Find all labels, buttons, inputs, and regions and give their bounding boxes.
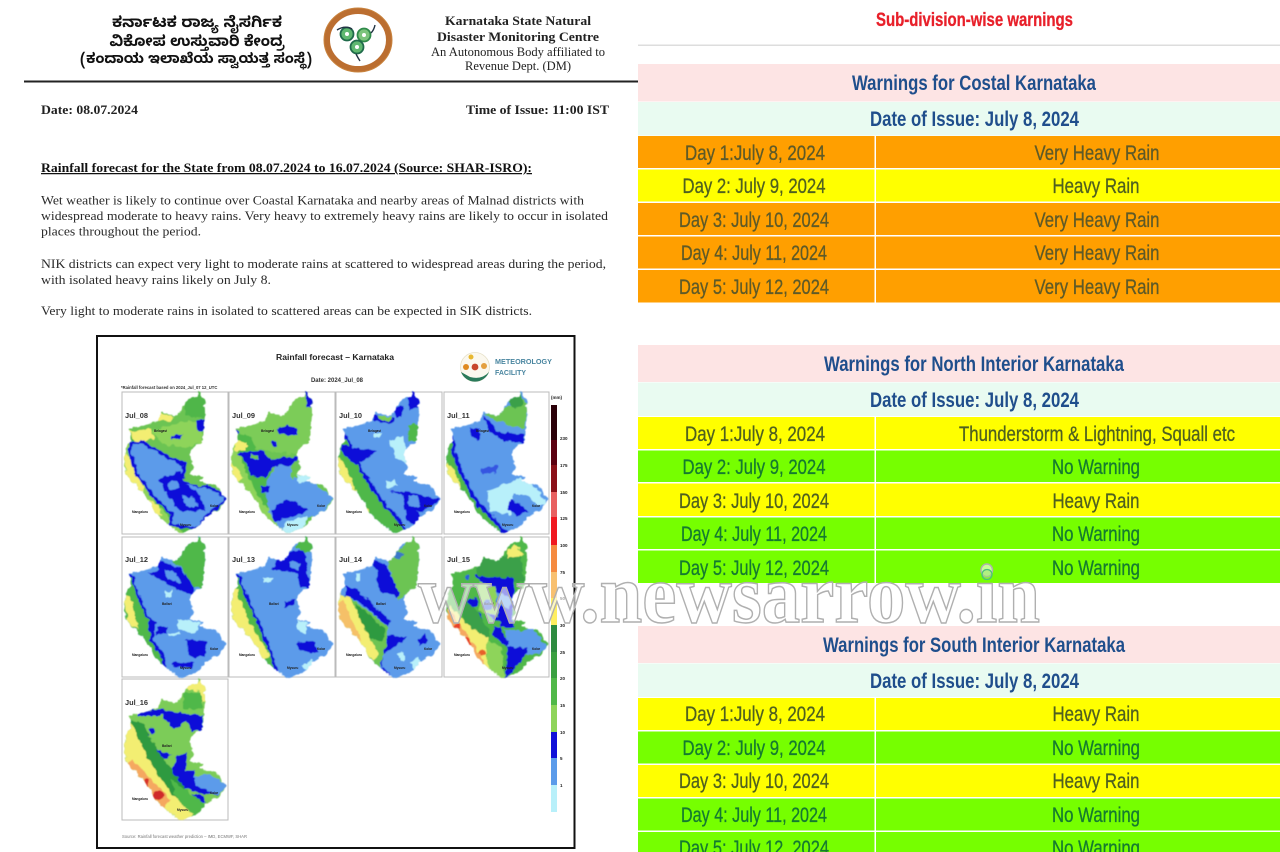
map: Jul_16: Mangaluru: [132, 797, 148, 801]
row: Day 5: [638, 832, 1280, 852]
date of issue: Date of Issue: July 8, 2024: [870, 389, 1079, 412]
row: Day 3: [638, 203, 1280, 235]
map: Jul_12: Mysuru: [180, 666, 191, 670]
map: Jul_10: Mysuru: [394, 523, 405, 527]
row: Day 4: [638, 518, 1280, 549]
row: Day 1: Day 1:July 8, 2024: [685, 142, 825, 165]
row: Day 1: Day 1:July 8, 2024: [685, 423, 825, 446]
text block: coastal forecast: widespread moderate to heavy rains. Very heavy to extremely heavy rains are likely to occur in isolated: [41, 209, 609, 223]
issue time: Time of Issue: 11:00 IST: [466, 103, 610, 117]
row: Day 3: Heavy Rain: [1052, 770, 1140, 793]
date of issue: Date of Issue: July 8, 2024: [870, 670, 1079, 693]
row: Day 3: Very Heavy Rain: [1034, 209, 1160, 232]
row: Day 4: Day 4: July 11, 2024: [681, 523, 827, 546]
table heading: [638, 64, 1280, 102]
Kannada organisation name: ವಿಕೋಪ ಉಸ್ತುವಾರಿ ಕೇಂದ್ರ: [110, 33, 285, 55]
map: Jul_08: Kolar: [210, 504, 219, 508]
text block: NIK forecast: NIK districts can expect very light to moderate rains at scattered to widespread areas during the period,: [41, 257, 606, 271]
map: Jul_08: Belagavi: [154, 429, 167, 433]
row: Day 3: Day 3: July 10, 2024: [679, 209, 829, 232]
map: Jul_14: Kolar: [424, 647, 433, 651]
map: Jul_12: Kolar: [210, 647, 219, 651]
text block: coastal forecast: places throughout the period.: [41, 224, 201, 238]
row: Day 3: Day 3: July 10, 2024: [679, 770, 829, 793]
map: Jul_15: Mangaluru: [454, 653, 470, 657]
map: Jul_14: Mysuru: [394, 666, 405, 670]
row: Day 4: Day 4: July 11, 2024: [681, 804, 827, 827]
map: Jul_16: Kolar: [210, 791, 219, 795]
row: Day 3: Heavy Rain: [1052, 490, 1140, 513]
map sheet date: Date: 2024_Jul_08: [311, 378, 364, 384]
row: Day 1: [638, 698, 1280, 730]
map: Jul_11: Jul_11: [447, 411, 470, 420]
row: Day 1: [638, 417, 1280, 449]
legend: rainfall colour bar: 20: [560, 676, 566, 681]
legend: rainfall colour bar: 125: [560, 516, 568, 521]
legend: rainfall colour bar: 100: [560, 543, 568, 548]
map: Jul_09: Mysuru: [287, 523, 298, 527]
row: Day 3: [638, 484, 1280, 516]
map: Jul_11: Mangaluru: [454, 510, 470, 514]
row: Day 4: [638, 798, 1280, 830]
row: Day 1: Very Heavy Rain: [1034, 142, 1160, 165]
English organisation name: An Autonomous Body affiliated to: [431, 45, 605, 59]
map: Jul_09: Kolar: [317, 504, 326, 508]
icon: meteorology facility logo: [460, 352, 552, 382]
map: Jul_14: Jul_14: [339, 555, 363, 564]
map: Jul_16: Ballari: [162, 744, 172, 748]
map: Jul_11: Mysuru: [502, 523, 513, 527]
English organisation name: Revenue Dept. (DM): [465, 59, 571, 73]
map: Jul_14: Ballari: [376, 602, 386, 606]
row: Day 1: Heavy Rain: [1052, 703, 1140, 726]
legend: rainfall colour bar: 25: [560, 650, 566, 655]
legend: rainfall colour bar: 50: [560, 596, 566, 601]
map: Jul_13: Kolar: [317, 647, 326, 651]
map: Jul_10: Kolar: [424, 504, 433, 508]
map: Jul_14: [336, 537, 442, 679]
table heading: Warnings for North Interior Karnataka: [824, 353, 1124, 376]
issue date: Date: 08.07.2024: [41, 103, 139, 117]
map: Jul_09: Jul_09: [232, 411, 255, 420]
map: Jul_16: Mysuru: [177, 808, 188, 812]
legend: rainfall colour bar: 75: [560, 570, 566, 575]
English organisation name: [431, 14, 605, 73]
map: Jul_11: Kolar: [532, 504, 541, 508]
icon: meteorology facility logo: METEOROLOGY: [495, 357, 552, 366]
row: Day 4: Very Heavy Rain: [1034, 242, 1160, 265]
map: Jul_09: [227, 392, 335, 538]
date of issue: Date of Issue: July 8, 2024: [870, 108, 1079, 131]
row: Day 5: [638, 550, 1280, 583]
map: Jul_15: Jul_15: [447, 555, 470, 564]
map: Jul_10: [334, 392, 442, 538]
map: Jul_10: Jul_10: [339, 411, 362, 420]
panel: South Interior Karnataka warnings: [638, 626, 1280, 852]
row: Day 2: No Warning: [1052, 737, 1140, 760]
legend: rainfall colour bar: 1: [560, 783, 563, 788]
map: Jul_08: Mangaluru: [132, 510, 148, 514]
text block: NIK forecast: [41, 257, 606, 287]
icon: meteorology facility logo: FACILITY: [495, 368, 526, 377]
map: Jul_09: Mangaluru: [239, 510, 255, 514]
map: Jul_15: Kolar: [532, 647, 541, 651]
panel: North Interior Karnataka warnings: [638, 345, 1280, 583]
table heading: [638, 626, 1280, 663]
map: Jul_08: Jul_08: [125, 411, 148, 420]
map: Jul_11: [442, 392, 550, 538]
row: Day 5: Day 5: July 12, 2024: [679, 557, 829, 580]
map: Jul_15: Ballari: [484, 602, 494, 606]
row: Day 5: [638, 270, 1280, 302]
text block: coastal forecast: [41, 194, 609, 238]
row: Day 1: Day 1:July 8, 2024: [685, 703, 825, 726]
map: Jul_15: [444, 537, 550, 679]
map: Jul_10: Mangaluru: [346, 510, 362, 514]
row: Day 2: No Warning: [1052, 456, 1140, 479]
map: Jul_12: [120, 537, 228, 683]
legend: rainfall colour bar: 15: [560, 703, 566, 708]
English organisation name: Disaster Monitoring Centre: [437, 30, 599, 44]
map: Jul_13: Mysuru: [287, 666, 298, 670]
English organisation name: Karnataka State Natural: [445, 14, 592, 28]
Kannada organisation name: [80, 14, 312, 71]
row: Day 5: Day 5: July 12, 2024: [679, 276, 829, 299]
map: Jul_16: [120, 679, 228, 825]
Kannada organisation name: (ಕಂದಾಯ ಇಲಾಖೆಯ ಸ್ವಾಯತ್ತ ಸಂಸ್ಥೆ): [80, 51, 312, 71]
map: Jul_14: Mangaluru: [346, 653, 362, 657]
text block: NIK forecast: with isolated heavy rains likely on July 8.: [41, 273, 271, 287]
row: Day 5: No Warning: [1052, 557, 1140, 580]
table heading: Warnings for Costal Karnataka: [852, 72, 1096, 95]
legend: rainfall colour bar: 175: [560, 463, 568, 468]
map: Jul_09: Belagavi: [261, 429, 274, 433]
row: Day 3: [638, 765, 1280, 797]
row: Day 2: Day 2: July 9, 2024: [682, 175, 826, 198]
map: Jul_11: Belagavi: [476, 429, 489, 433]
map: Jul_12: Ballari: [162, 602, 172, 606]
table heading: Warnings for South Interior Karnataka: [823, 634, 1125, 657]
map: Jul_08: Mysuru: [180, 523, 191, 527]
text block: coastal forecast: Wet weather is likely to continue over Coastal Karnataka and nearby areas of Malnad districts with: [41, 194, 585, 208]
map: Jul_13: Jul_13: [232, 555, 255, 564]
map sheet source note: Source: Rainfall forecast weather prediction – IMD, ECMWF, SHAR: [122, 834, 247, 839]
row: Day 2: Day 2: July 9, 2024: [682, 456, 826, 479]
legend: rainfall colour bar: 150: [560, 490, 568, 495]
row: Day 2: Heavy Rain: [1052, 175, 1140, 198]
row: Day 4: No Warning: [1052, 523, 1140, 546]
row: Day 5: Very Heavy Rain: [1034, 276, 1160, 299]
legend: rainfall colour bar: [551, 395, 568, 812]
map: Jul_13: Mangaluru: [239, 653, 255, 657]
map sheet title: Rainfall forecast – Karnataka: [276, 353, 395, 362]
legend: rainfall colour bar: 230: [560, 436, 568, 441]
panel: Coastal Karnataka warnings: [638, 64, 1280, 302]
legend: rainfall colour bar: (mm): [551, 395, 563, 400]
map: Jul_12: Mangaluru: [132, 653, 148, 657]
row: Day 2: [638, 732, 1280, 764]
date of issue: [638, 382, 1280, 416]
Kannada organisation name: ಕರ್ನಾಟಕ ರಾಜ್ಯ ನೈಸರ್ಗಿಕ: [112, 14, 282, 36]
map: Jul_13: [227, 537, 335, 683]
heading: rainfall forecast: Rainfall forecast for the State from 08.07.2024 to 16.07.2024 (Source: SHAR-ISRO):: [41, 161, 532, 175]
map: Jul_15: Mysuru: [502, 666, 513, 670]
panel: rainfall forecast map sheet: [97, 336, 574, 848]
panel: bulletin letterhead: [24, 8, 638, 82]
icon: KSNDMC round logo: [324, 8, 392, 72]
map: Jul_08: [120, 392, 228, 538]
map: Jul_16: Jul_16: [125, 698, 148, 707]
row: Day 2: [638, 450, 1280, 482]
text block: SIK forecast: Very light to moderate rains in isolated to scattered areas can be expected in SIK districts.: [41, 304, 532, 318]
map sheet base run note: *Rainfall forecast based on 2024_Jul_07 12_UTC: [121, 385, 217, 390]
heading: sub-division warnings: Sub-division-wise warnings: [876, 10, 1073, 31]
map: Jul_12: Jul_12: [125, 555, 148, 564]
watermark: www.newsarrow.in: www.newsarrow.in: [418, 548, 1040, 641]
row: Day 2: Day 2: July 9, 2024: [682, 737, 826, 760]
map: Jul_10: Belagavi: [368, 429, 381, 433]
row: Day 4: No Warning: [1052, 804, 1140, 827]
legend: rainfall colour bar: 5: [560, 756, 563, 761]
map: Jul_13: Ballari: [269, 602, 279, 606]
table heading: [638, 345, 1280, 382]
row: Day 4: [638, 236, 1280, 268]
date of issue: [638, 102, 1280, 136]
legend: rainfall colour bar: 30: [560, 623, 566, 628]
row: Day 3: Day 3: July 10, 2024: [679, 490, 829, 513]
row: Day 2: [638, 170, 1280, 202]
row: Day 1: [638, 136, 1280, 168]
date of issue: [638, 664, 1280, 697]
row: Day 4: Day 4: July 11, 2024: [681, 242, 827, 265]
legend: rainfall colour bar: 10: [560, 730, 566, 735]
